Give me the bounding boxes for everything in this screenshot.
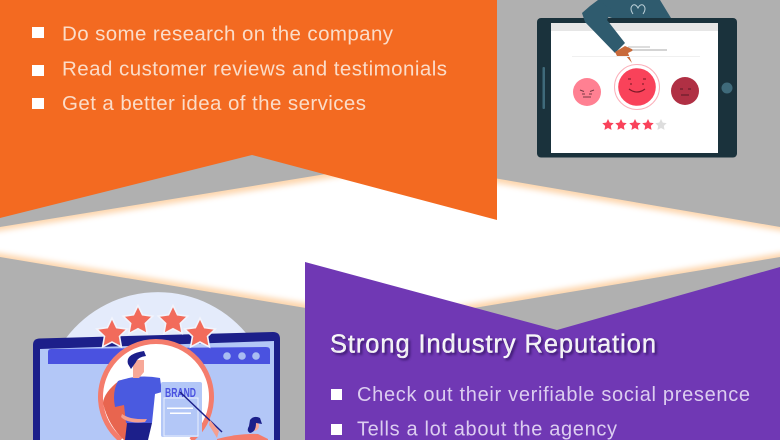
heading: Strong Industry Reputation: Strong Industry Reputation [330,330,656,358]
reputation bullet list [331,384,750,440]
pink face [573,78,601,106]
browser window [33,332,280,440]
brand document [161,382,202,437]
arm pointing at screen [572,0,700,63]
man with cape [103,351,162,440]
four stars [97,306,215,347]
tablet screen [551,23,718,153]
research bullet list [32,22,447,115]
small bearded man [209,417,268,440]
red happy face [614,64,660,110]
brand label: BRAND [165,385,196,400]
icon: tablet with rating faces [537,0,737,158]
bullet 2: Read customer reviews and testimonials [62,58,447,80]
dark red face [671,77,699,105]
white glowing diamond band [0,174,780,308]
pointer stick [180,392,222,432]
bullet 2: Tells a lot about the agency [357,418,617,440]
panel: purple reputation panel [305,262,780,440]
pale backdrop circle [66,292,246,338]
tablet body [537,18,737,158]
bullet 3: Get a better idea of the services [62,92,366,115]
panel: orange research panel [0,0,497,220]
star rating [602,119,667,130]
bullet 1: Check out their verifiable social presence [357,384,750,406]
icon: brand reputation illustration [33,292,280,440]
bullet 1: Do some research on the company [62,22,394,46]
ring with white centre [101,342,212,440]
